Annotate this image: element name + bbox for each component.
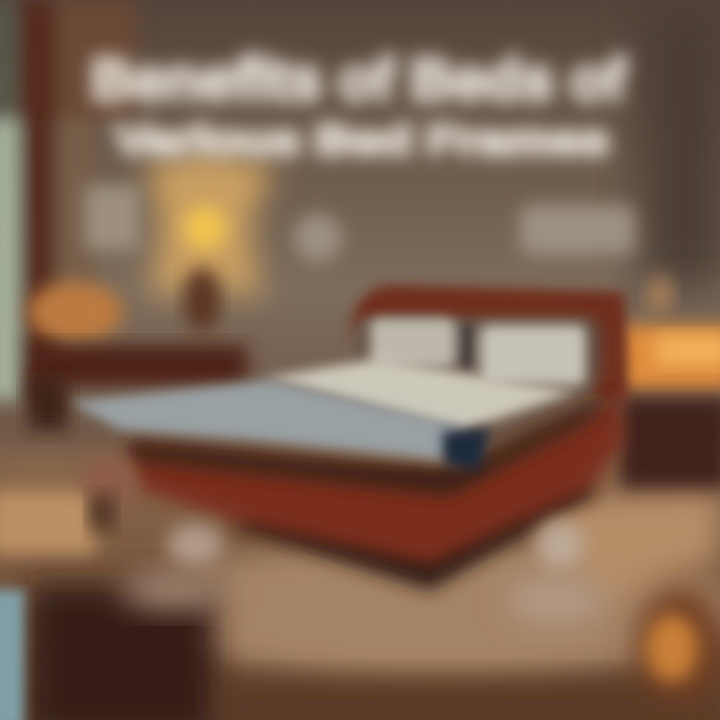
wall icons bbox=[294, 205, 635, 262]
mattress bbox=[265, 358, 575, 432]
left nightstand with lamp bbox=[27, 282, 247, 430]
floor lights and objects bbox=[82, 456, 720, 703]
pillows bbox=[370, 318, 586, 385]
bed frame bbox=[130, 395, 625, 565]
window and curtain on left bbox=[0, 0, 136, 400]
title: Various Bed Frames bbox=[114, 116, 610, 163]
floor and rug bbox=[0, 450, 720, 720]
floor shadow bbox=[230, 470, 600, 590]
title: Benefits of Beds of bbox=[90, 46, 626, 113]
right nightstand with lamp bbox=[618, 275, 720, 488]
title bbox=[90, 46, 626, 163]
headboard bbox=[350, 285, 628, 400]
bed bbox=[70, 285, 628, 590]
wall lamp glow bbox=[85, 150, 275, 332]
